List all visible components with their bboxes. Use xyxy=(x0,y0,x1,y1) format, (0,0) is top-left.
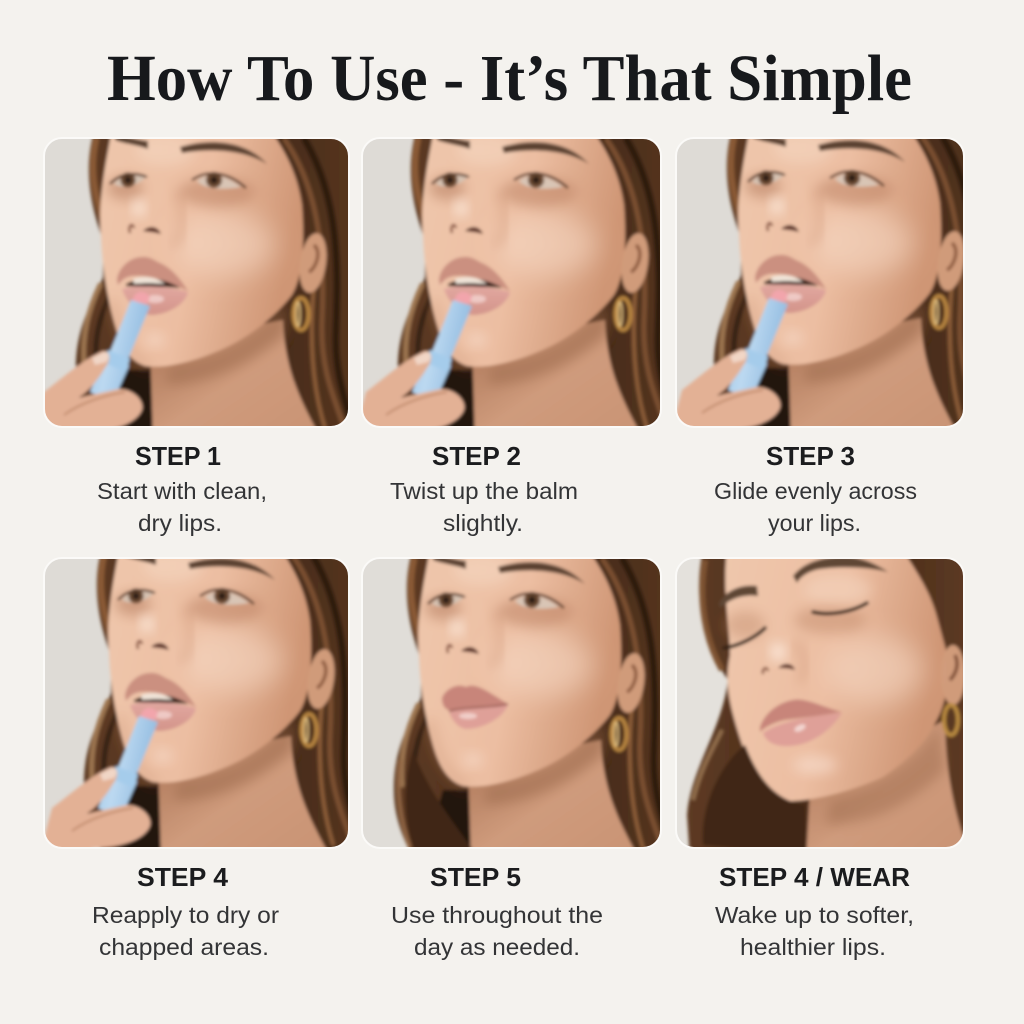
caption: step 2: STEP 2 xyxy=(432,441,521,471)
caption: step 5: STEP 5 xyxy=(430,862,521,892)
caption: step 1 xyxy=(97,441,267,536)
icon: closed eyes xyxy=(724,603,867,648)
caption: step 5: Use throughout the xyxy=(391,902,603,928)
caption: step 2 xyxy=(390,441,578,536)
caption: step 5: day as needed. xyxy=(414,934,580,960)
panel: step 1 photo xyxy=(45,139,348,426)
panel: step 2 photo xyxy=(363,139,660,426)
caption: step 1: Start with clean, xyxy=(97,478,267,504)
panel: step 6 photo with closed eyes xyxy=(677,559,963,847)
title: How To Use - It’s That Simple xyxy=(107,42,912,115)
caption: step 4 xyxy=(92,862,279,960)
caption: step 5 xyxy=(391,862,603,960)
caption: step 3 xyxy=(714,441,917,536)
caption: step 4 / wear: Wake up to softer, xyxy=(715,902,914,928)
caption: step 3: STEP 3 xyxy=(766,441,855,471)
caption: step 4 / wear: STEP 4 / WEAR xyxy=(719,862,910,892)
caption: step 4: chapped areas. xyxy=(99,934,269,960)
panel: step 5 photo xyxy=(363,559,660,847)
caption: step 3: your lips. xyxy=(768,510,861,536)
caption: step 2: Twist up the balm xyxy=(390,478,578,504)
panel rims xyxy=(44,138,964,848)
caption: step 3: Glide evenly across xyxy=(714,478,917,504)
caption: step 2: slightly. xyxy=(443,510,523,536)
caption: step 4: STEP 4 xyxy=(137,862,229,892)
lips xyxy=(760,699,842,746)
panel: step 3 photo xyxy=(677,139,963,426)
icon: eyebrows xyxy=(719,557,888,608)
caption: step 4: Reapply to dry or xyxy=(92,902,279,928)
caption: step 4 / wear xyxy=(715,862,914,960)
panel: step 4 photo xyxy=(45,559,348,847)
caption: step 1: STEP 1 xyxy=(135,441,221,471)
caption: step 4 / wear: healthier lips. xyxy=(740,934,886,960)
icon: hoop earring xyxy=(944,705,958,735)
caption: step 1: dry lips. xyxy=(138,510,222,536)
